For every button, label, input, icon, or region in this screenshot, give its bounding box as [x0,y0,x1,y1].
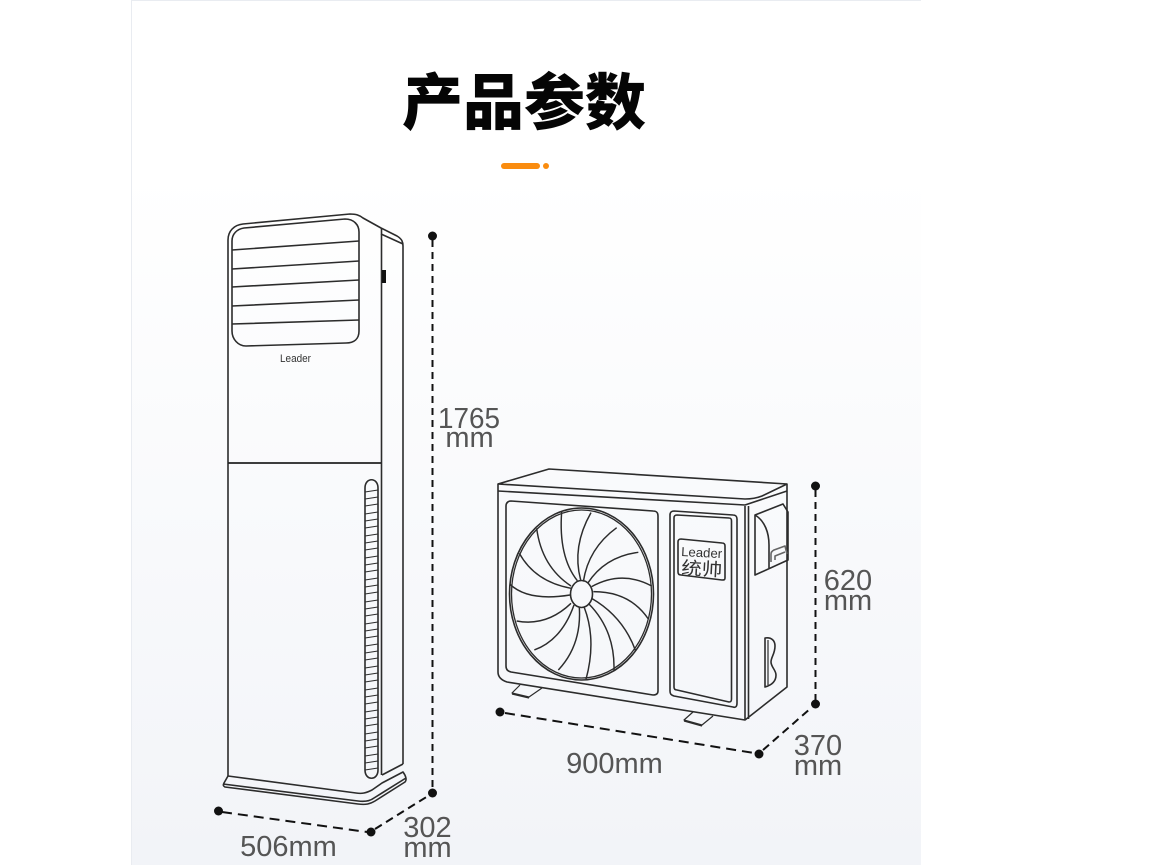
side vent [365,480,378,778]
indoor height label: mm [445,422,494,454]
background panel [131,0,921,865]
grille [232,219,359,346]
indoor unit body [228,214,403,776]
louvers [232,241,359,324]
outdoor width label: 900mm [566,748,663,780]
corner posts [745,506,748,720]
indoor depth label: 302 [403,812,452,844]
outdoor width dimension [496,708,764,758]
outdoor depth dimension [763,708,811,750]
outdoor depth label: 370 [794,730,842,762]
vent slats [365,490,378,770]
title: 产品参数 [402,53,646,142]
indoor unit [223,214,406,804]
indoor logo: Leader [280,353,311,365]
outdoor depth label: mm [794,750,842,782]
logo badge [678,539,725,580]
fan hub [570,580,592,608]
indoor depth dimension [375,796,428,829]
outdoor body [498,469,787,720]
feet [512,685,542,698]
outdoor logo text: 统帅 [681,554,723,582]
outdoor height label: mm [824,585,872,617]
indoor depth label [403,812,452,864]
outdoor logo text [681,544,723,582]
indoor height dimension [428,232,437,798]
fan panel [506,501,658,695]
outdoor height label: 620 [824,565,872,597]
panel seam [228,462,381,464]
outdoor depth label [794,730,842,782]
top side edge [381,234,403,244]
indoor width dimension [214,806,376,836]
fan blades [510,512,652,679]
outdoor unit [498,469,788,726]
indoor height label [438,403,500,454]
outdoor height label [824,565,872,617]
lid [498,484,787,499]
side panel inner [674,515,732,702]
indoor width label: 506mm [240,831,337,863]
base [223,772,406,804]
indoor depth label: mm [403,832,452,864]
pipe cover [765,638,776,687]
indoor height label: 1765 [438,403,500,435]
handle [755,504,788,575]
side panel outer [670,511,737,707]
fan rim [510,508,654,680]
outdoor height dimension [811,482,820,708]
outdoor logo text: Leader [681,544,723,561]
knob [382,270,386,283]
orange accent [501,163,549,169]
fan [510,508,654,680]
